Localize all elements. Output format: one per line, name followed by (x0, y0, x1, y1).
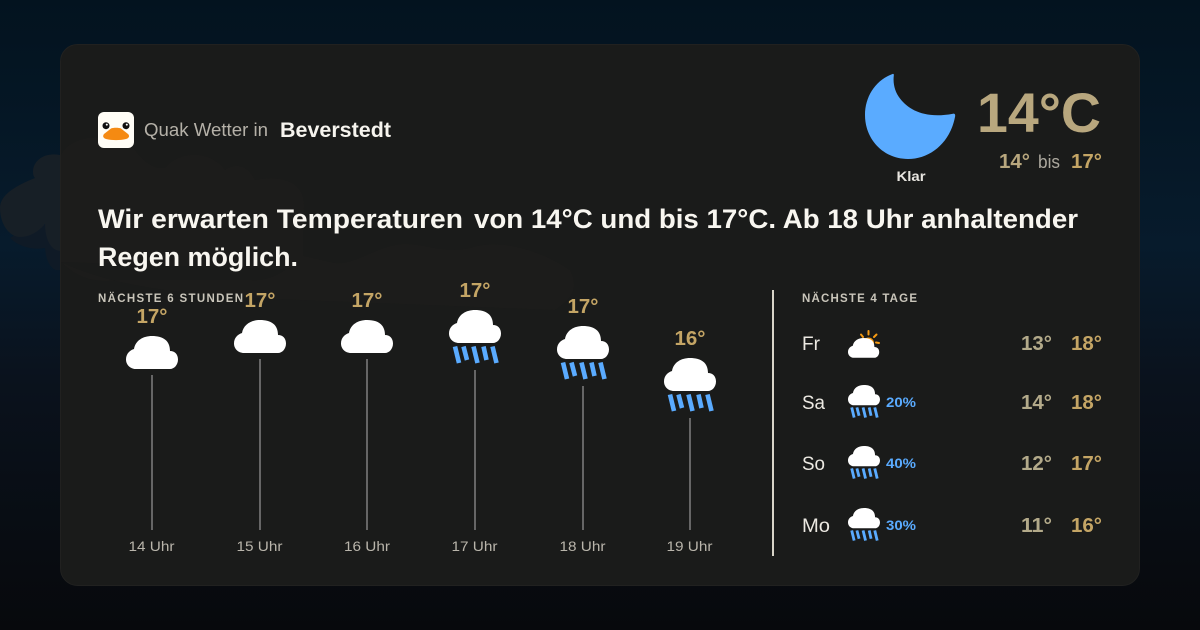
day row Sunday: 12° (1021, 453, 1052, 475)
day row Monday: 11° (1021, 515, 1052, 537)
day row Sunday: 17° (1071, 453, 1102, 475)
panel: next 6 hours (98, 280, 716, 554)
current temperature: 14°C (977, 81, 1101, 144)
max temperature: 17° (1071, 151, 1102, 173)
hour column 14 Uhr (126, 306, 178, 554)
brand label: Quak Wetter in (144, 120, 268, 140)
hour column 15 Uhr (234, 290, 286, 554)
day row Friday: 13° (1021, 333, 1052, 355)
brand header (98, 112, 391, 148)
day row Sunday: So (802, 454, 825, 475)
hour column 15 Uhr: 17° (244, 290, 276, 312)
day row Saturday: 20% (886, 395, 916, 410)
hour column 14 Uhr: 14 Uhr (128, 538, 175, 554)
hour column 17 Uhr: 17° (460, 280, 490, 302)
hour column 19 Uhr (664, 328, 716, 554)
hour column 15 Uhr: 15 Uhr (236, 538, 283, 554)
icon: duck logo (98, 112, 134, 148)
section heading: NÄCHSTE 4 TAGE (802, 292, 917, 305)
faint cloud shadow left of card (10, 225, 60, 270)
day row Saturday: 14° (1021, 392, 1052, 414)
day row Monday: 30% (886, 518, 916, 533)
section heading: NÄCHSTE 6 STUNDEN (98, 292, 243, 305)
headline summary (98, 204, 1079, 272)
panel divider (772, 290, 774, 556)
day row Saturday (802, 385, 1102, 418)
icon: crescent moon (865, 74, 955, 159)
hour column 17 Uhr (449, 280, 501, 554)
day row Saturday: Sa (802, 393, 825, 414)
day row Friday: 18° (1071, 333, 1102, 355)
panel: weather card (60, 44, 1140, 586)
day row Saturday: 18° (1071, 392, 1102, 414)
hour column 18 Uhr (557, 296, 609, 554)
day row Monday: Mo (802, 516, 830, 537)
hour column 17 Uhr: 17 Uhr (452, 538, 498, 554)
min temperature: 14° (999, 151, 1030, 173)
day row Monday (802, 508, 1102, 541)
hour column 18 Uhr: 17° (568, 296, 598, 318)
current weather (865, 74, 1102, 184)
panel: next 4 days (802, 292, 1102, 541)
faint background cloud left of card (0, 154, 60, 251)
range separator: bis (1038, 152, 1060, 172)
hour column 16 Uhr: 16 Uhr (344, 538, 390, 554)
day row Sunday: 40% (886, 456, 916, 471)
headline summary: Regen möglich. (98, 242, 298, 272)
hour column 18 Uhr: 18 Uhr (560, 538, 606, 554)
location name: Beverstedt (280, 119, 391, 142)
hour column 16 Uhr (341, 290, 393, 554)
headline summary: von 14°C und bis 17°C. Ab 18 Uhr anhaltender (474, 204, 1079, 234)
day row Sunday (802, 446, 1102, 479)
headline summary: Wir erwarten Temperaturen (98, 204, 463, 234)
icon: sun behind cloud (848, 331, 879, 358)
day row Friday (802, 331, 1102, 358)
hour column 19 Uhr: 16° (674, 328, 706, 350)
faint cloud watermark inside card (61, 137, 574, 310)
hour column 16 Uhr: 17° (352, 290, 382, 312)
condition label: Klar (896, 168, 926, 184)
day row Monday: 16° (1071, 515, 1102, 537)
day row Friday: Fr (802, 334, 821, 355)
hour column 14 Uhr: 17° (136, 306, 168, 328)
hour column 19 Uhr: 19 Uhr (666, 538, 713, 554)
